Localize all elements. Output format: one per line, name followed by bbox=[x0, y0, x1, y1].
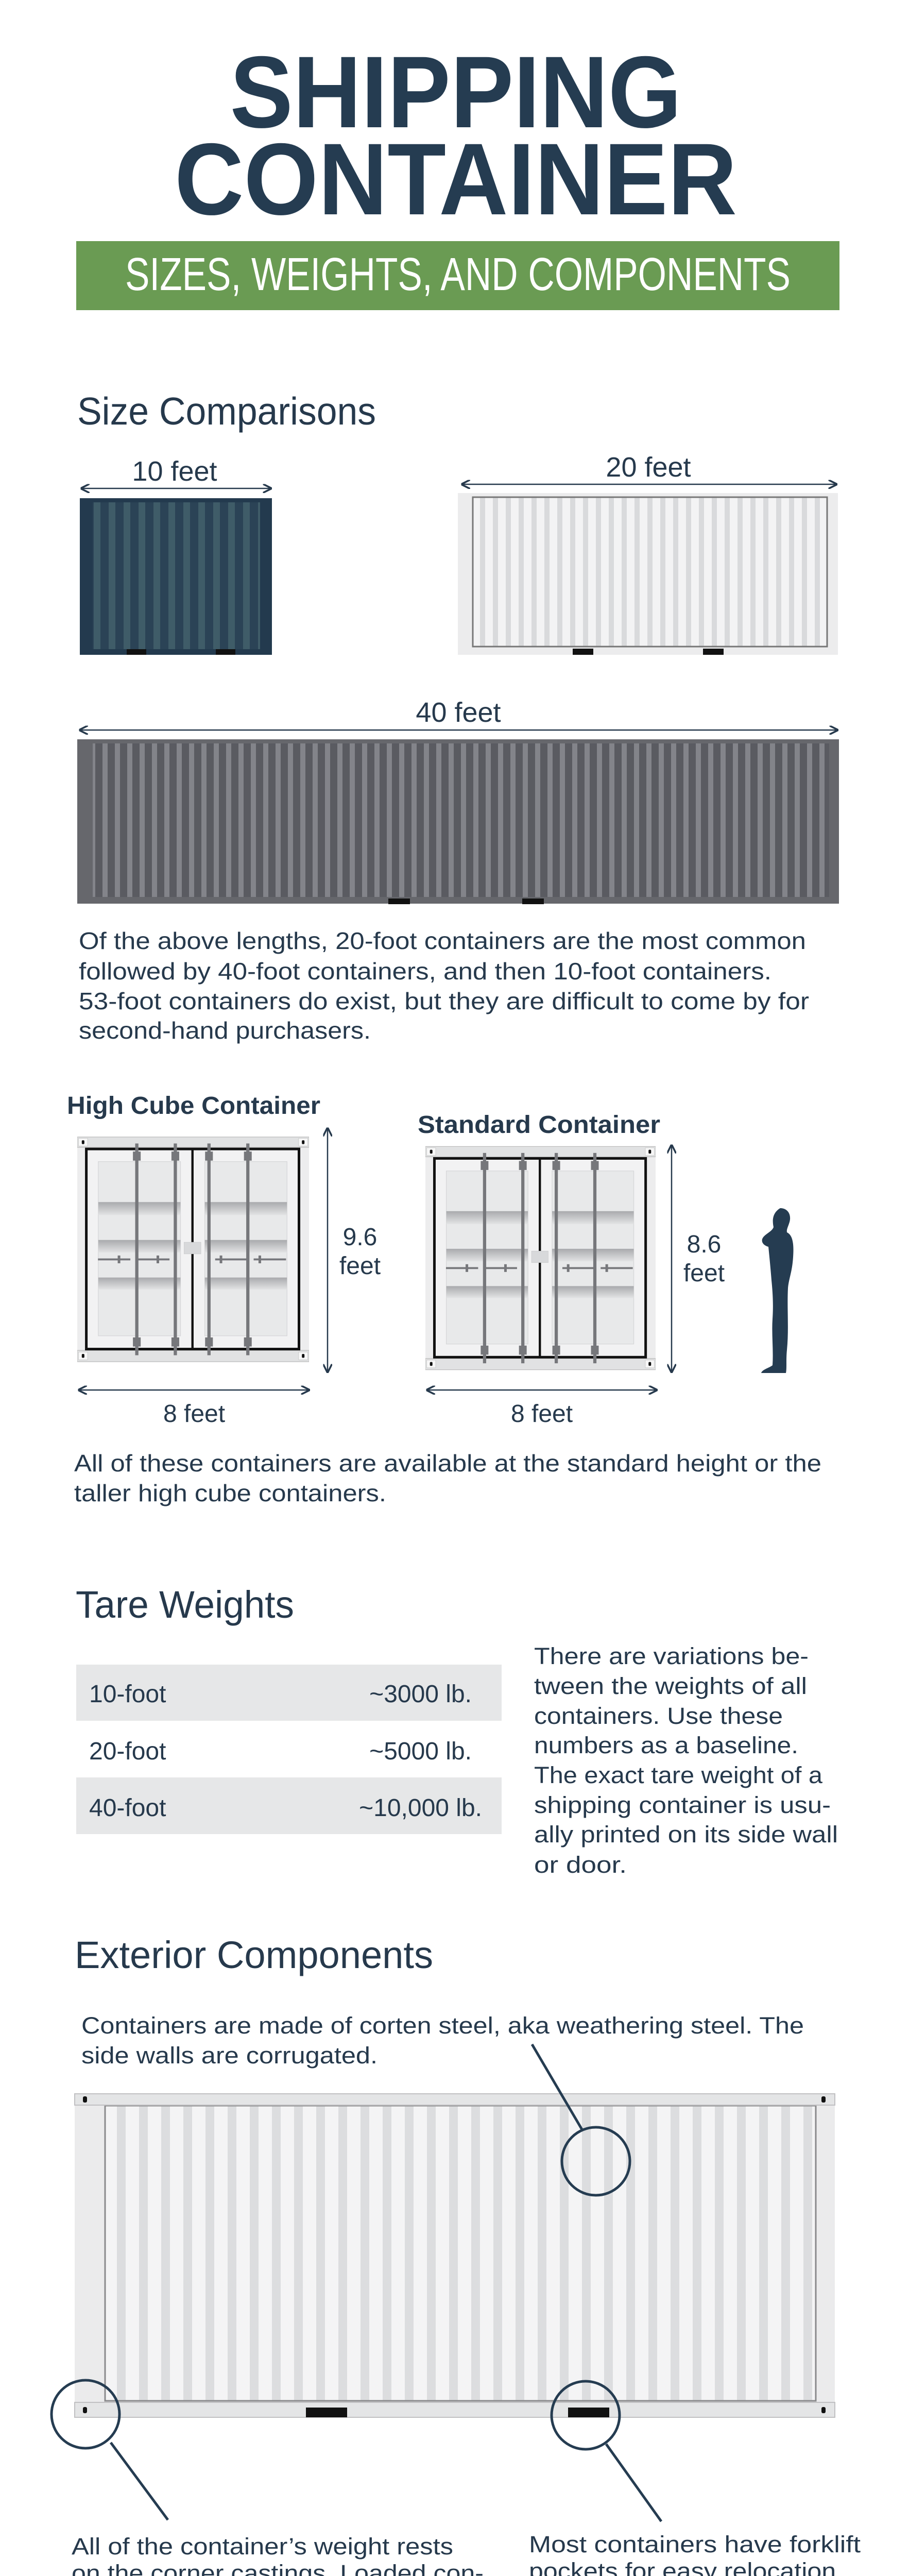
heading: Tare Weights: Tare Weights bbox=[76, 1583, 294, 1626]
40 ft container bbox=[77, 697, 839, 904]
table: tare weights: 40-foot bbox=[89, 1794, 166, 1822]
text: height note bbox=[74, 1450, 821, 1506]
table: tare weights: 10-foot bbox=[89, 1681, 166, 1708]
text: length comparison note: Of the above lengths, 20-foot containers are the most common bbox=[79, 927, 806, 954]
icon: person silhouette bbox=[761, 1208, 793, 1373]
table: tare weights: 20-foot bbox=[89, 1738, 166, 1765]
text: height note: All of these containers are available at the standard height or the bbox=[74, 1450, 821, 1477]
20 ft container bbox=[458, 452, 838, 655]
high cube container: High Cube Container bbox=[67, 1092, 320, 1120]
heading: Exterior Components: Exterior Components bbox=[75, 1934, 433, 1976]
high cube container bbox=[67, 1092, 381, 1428]
text: length comparison note: followed by 40-foot containers, and then 10-foot containers. bbox=[79, 958, 771, 985]
text: length comparison note bbox=[79, 927, 809, 1044]
title: SHIPPING bbox=[230, 35, 682, 149]
high cube container: feet bbox=[339, 1252, 381, 1280]
text: tare weight note: tween the weights of all bbox=[534, 1673, 807, 1699]
text: forklift pockets: Most containers have forklift bbox=[529, 2531, 861, 2557]
subtitle banner bbox=[76, 241, 839, 310]
standard container: 8.6 bbox=[687, 1231, 721, 1258]
table: tare weights bbox=[76, 1665, 502, 1834]
text: corten steel caption: Containers are made of corten steel, aka weathering steel. The bbox=[81, 2012, 804, 2039]
10 ft container: 10 feet bbox=[132, 456, 217, 487]
standard container: 8 feet bbox=[511, 1400, 573, 1428]
text: corten steel caption bbox=[81, 2012, 804, 2069]
heading: Size Comparisons: Size Comparisons bbox=[77, 389, 376, 433]
text: tare weight note: There are variations be- bbox=[534, 1643, 809, 1669]
20 ft container: 20 feet bbox=[606, 452, 691, 483]
text: tare weight note: shipping container is usu- bbox=[534, 1792, 831, 1818]
text: tare weight note: or door. bbox=[534, 1852, 627, 1878]
callout: corner casting bbox=[52, 2380, 168, 2520]
text: tare weight note: The exact tare weight of a bbox=[534, 1762, 823, 1788]
40 ft container: 40 feet bbox=[416, 697, 501, 728]
text: length comparison note: 53-foot containers do exist, but they are difficult to come by for bbox=[79, 988, 809, 1014]
text: corten steel caption: side walls are corrugated. bbox=[81, 2042, 378, 2069]
text: height note: taller high cube containers. bbox=[74, 1480, 386, 1506]
text: length comparison note: second-hand purchasers. bbox=[79, 1017, 371, 1044]
callout: corrugated wall bbox=[532, 2044, 630, 2195]
10 ft container bbox=[80, 456, 272, 655]
text: tare weight note: numbers as a baseline. bbox=[534, 1732, 798, 1758]
text: tare weight note: ally printed on its side wall bbox=[534, 1821, 838, 1848]
side view container bbox=[75, 2094, 835, 2417]
text: corner castings: All of the container’s weight rests bbox=[72, 2533, 453, 2560]
standard container bbox=[418, 1111, 725, 1428]
table: tare weights: ~3000 lb. bbox=[369, 1681, 472, 1708]
standard container: Standard Container bbox=[418, 1111, 660, 1139]
high cube container: 9.6 bbox=[343, 1224, 377, 1251]
text: corner castings bbox=[72, 2533, 484, 2576]
high cube container: 8 feet bbox=[163, 1400, 225, 1428]
text: forklift pockets bbox=[529, 2531, 861, 2576]
text: tare weight note bbox=[534, 1643, 838, 1878]
title: CONTAINER bbox=[175, 122, 737, 236]
table: tare weights: ~10,000 lb. bbox=[359, 1794, 482, 1822]
title bbox=[175, 35, 737, 236]
standard container: feet bbox=[683, 1260, 725, 1287]
table: tare weights: ~5000 lb. bbox=[369, 1738, 472, 1765]
text: tare weight note: containers. Use these bbox=[534, 1703, 783, 1729]
callout: forklift pocket bbox=[552, 2381, 661, 2521]
